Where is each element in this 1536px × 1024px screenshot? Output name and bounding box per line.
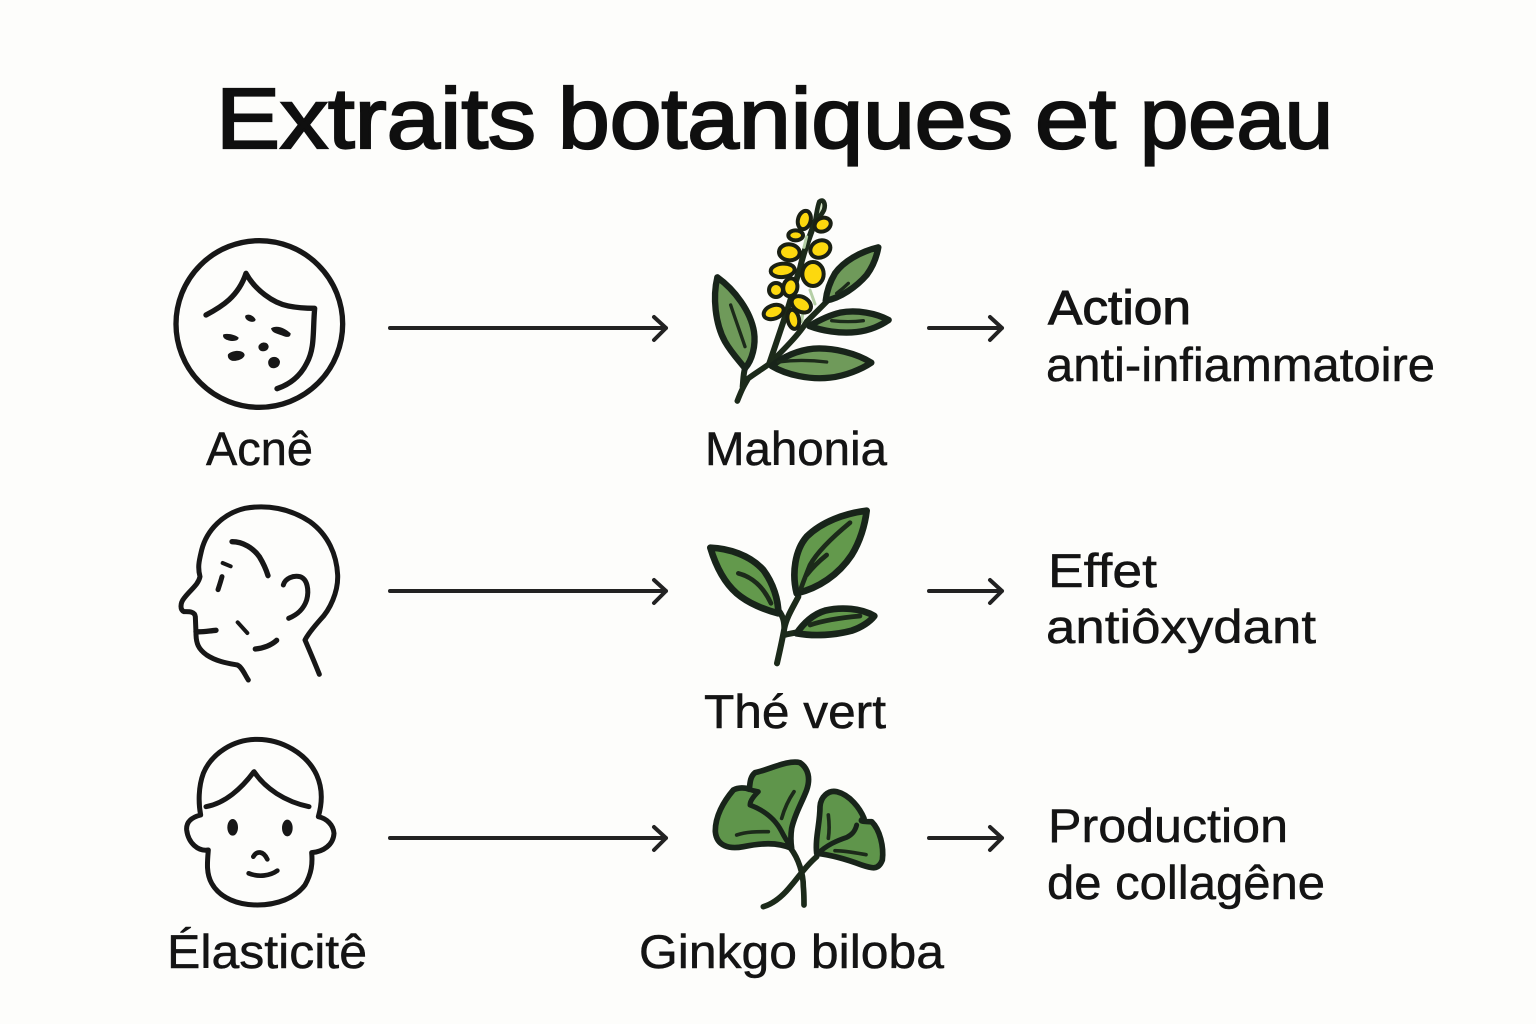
- leaves: [710, 548, 778, 613]
- text: Action anti-inflammatoire: [1046, 282, 1435, 391]
- title: et: [1035, 72, 1116, 167]
- arrow: acne to mahonia: [390, 317, 666, 340]
- icon: green tea sprig: [710, 511, 874, 663]
- title: [216, 72, 1333, 167]
- right leaf: [816, 791, 883, 868]
- stems: [791, 848, 804, 905]
- text: Effet antioxydant: Effet: [1048, 544, 1157, 597]
- text: Production de collagène: de collagêne: [1047, 856, 1325, 909]
- pale green bracts: [802, 237, 815, 322]
- leaf veins: [738, 523, 860, 625]
- arrow: mahonia to action: [929, 317, 1002, 340]
- yellow flowers: [762, 201, 833, 330]
- stems: [737, 222, 828, 401]
- text: Action anti-inflammatoire: Action: [1048, 282, 1191, 335]
- icon: face with acne: [176, 241, 343, 407]
- arrow: elasticity to ginkgo: [390, 827, 666, 850]
- text: Production de collagène: [1047, 799, 1325, 909]
- arrow: green tea to antioxidant: [929, 580, 1002, 603]
- text: Effet antioxydant: antiôxydant: [1046, 600, 1316, 653]
- left leaf: [715, 762, 809, 848]
- leaves: [715, 277, 755, 368]
- label: Mahonia: Mahonia: [705, 422, 888, 475]
- stem: [777, 597, 802, 663]
- label: Thé vert: Thé vert: [704, 685, 886, 738]
- label: Ginkgo biloba: Ginkgo biloba: [639, 925, 945, 978]
- title: botaniques: [558, 72, 1013, 167]
- icon: head profile with wrinkles: [181, 507, 338, 680]
- title: peau: [1140, 72, 1333, 167]
- icon: ginkgo biloba leaves: [715, 762, 883, 907]
- title: Extraits: [216, 72, 536, 167]
- text: Production de collagène: Production: [1048, 799, 1288, 852]
- icon: smiling face: [187, 739, 334, 905]
- text: Action anti-inflammatoire: anti-infiammatoire: [1046, 338, 1435, 391]
- label: Acnê: Acnê: [206, 422, 313, 475]
- icon: mahonia branch: [715, 201, 889, 401]
- label: Élasticitê: Élasticitê: [167, 925, 367, 978]
- arrow: wrinkles to green tea: [390, 580, 666, 603]
- arrow: ginkgo to collagen: [929, 827, 1002, 850]
- leaf veins: [737, 792, 866, 855]
- text: Effet antioxydant: [1046, 544, 1316, 653]
- leaf veins: [731, 283, 863, 362]
